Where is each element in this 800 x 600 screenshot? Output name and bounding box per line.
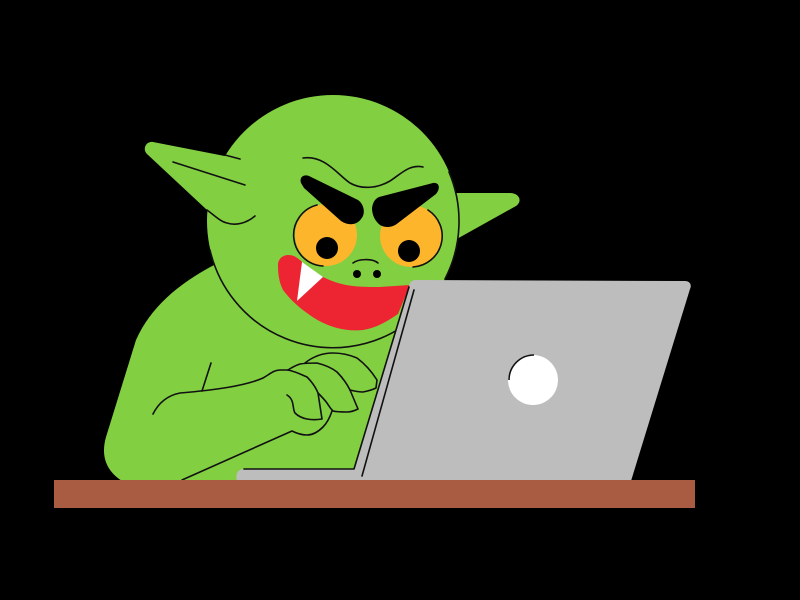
laptop screen and base (236, 280, 691, 481)
goblin arm and hand (153, 353, 377, 480)
left ear (145, 142, 258, 224)
mouth (278, 255, 410, 330)
laptop logo (508, 355, 558, 405)
right ear (450, 193, 520, 240)
goblin body (104, 265, 420, 481)
nose (353, 260, 381, 278)
right eye (380, 205, 442, 267)
fang (297, 262, 323, 301)
left eyebrow (301, 175, 364, 224)
right eyebrow (372, 183, 439, 227)
left eye (294, 204, 357, 266)
head outline (210, 172, 459, 348)
head (207, 95, 459, 347)
forehead wrinkle (303, 158, 423, 187)
table (54, 480, 695, 508)
